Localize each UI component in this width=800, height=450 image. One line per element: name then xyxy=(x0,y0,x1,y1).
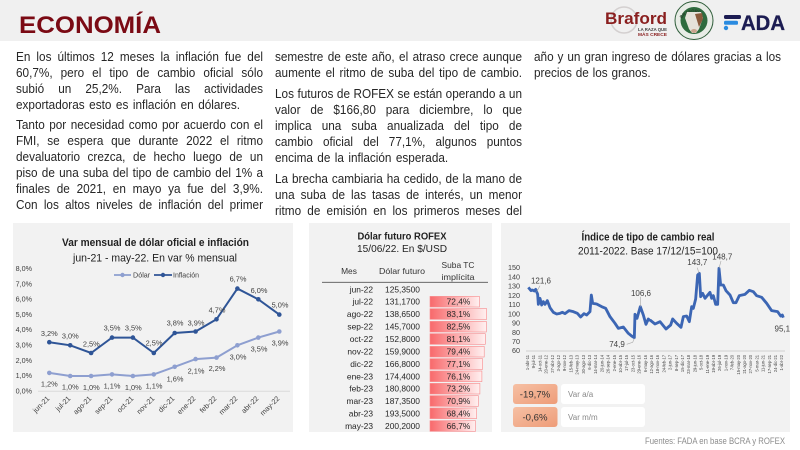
x axis date labels: 1-nov-19 xyxy=(723,354,728,371)
x axis date labels: 14-mar-14 xyxy=(593,354,598,374)
text column 1: FMI, se espera que durante 2022 el ritmo xyxy=(16,134,263,148)
x axis date labels: 2-ene-15 xyxy=(612,354,617,371)
y axis labels: 5,0% xyxy=(16,310,33,319)
data labels with leaders: 106,6 xyxy=(631,289,652,298)
table header: Dólar futuro xyxy=(379,266,425,276)
inflación data labels: 5,0% xyxy=(272,301,289,310)
x axis date labels: 17-sep-21 xyxy=(767,354,772,373)
dólar data labels: 1,1% xyxy=(146,382,163,391)
y axis labels: 130 xyxy=(508,282,520,291)
inflación data labels: 3,5% xyxy=(125,324,142,333)
inflación data labels: 2,5% xyxy=(83,340,100,349)
column: futures price: 125,3500 xyxy=(385,284,420,294)
column: implied rate values: 73,2% xyxy=(447,384,471,394)
x axis date labels: 23-mar-18 xyxy=(686,354,691,374)
inflación data labels: 6,7% xyxy=(230,275,247,284)
inflación data labels: 3,8% xyxy=(167,319,184,328)
inflación data labels: 3,5% xyxy=(104,324,121,333)
y axis labels: 100 xyxy=(508,309,520,318)
inflación data labels: 3,2% xyxy=(41,329,58,338)
logo: Braford: LA RAZA QUE xyxy=(638,27,667,32)
callout: variación anual: Var a/a xyxy=(568,390,594,399)
callout: variación anual xyxy=(513,384,645,404)
x axis date labels: 29-ene-16 xyxy=(637,354,642,374)
column: months: jul-22 xyxy=(352,297,373,307)
x axis date labels: 3-ago-12 xyxy=(556,354,561,371)
column: months: jun-22 xyxy=(349,284,373,294)
x axis labels xyxy=(30,394,281,417)
column: months: abr-23 xyxy=(349,408,373,418)
table header: implícita xyxy=(442,272,475,282)
x axis date labels: 15-may-20 xyxy=(736,354,741,375)
column: futures price: 138,6500 xyxy=(385,309,420,319)
column: futures price: 152,8000 xyxy=(385,334,420,344)
table header: Suba TC xyxy=(442,260,474,270)
text column 1: En los últimos 12 meses la inflación fue del xyxy=(16,50,263,64)
panel: dólar futuro ROFEX table xyxy=(309,223,492,432)
line: inflación xyxy=(47,286,282,355)
text column 1: finales de 2021, en mayo ya fue del 3,9%. xyxy=(16,182,263,196)
callout: variación anual: -19,7% xyxy=(520,390,551,400)
column: months: nov-22 xyxy=(347,347,373,357)
x axis date labels: 5-oct-18 xyxy=(699,354,704,370)
data labels with leaders: 95,1 xyxy=(775,324,791,334)
text column 2: semestre de este año, el atraso crece aunque xyxy=(275,50,522,64)
inflación data labels: 4,7% xyxy=(209,306,226,315)
inflación data labels: 6,0% xyxy=(251,286,268,295)
column: futures price: 187,3500 xyxy=(385,396,420,406)
y axis labels: 2,0% xyxy=(16,356,33,365)
y axis labels: 6,0% xyxy=(16,294,33,304)
logo: Braford seal with cow xyxy=(674,1,714,40)
x axis date labels: 21-ago-20 xyxy=(742,354,747,374)
data labels with leaders: 74,9 xyxy=(609,340,625,349)
column: months: ene-23 xyxy=(347,371,373,381)
callout: variación mensual: -0,6% xyxy=(522,412,548,424)
column: futures price: 180,8000 xyxy=(385,384,420,394)
table header: Mes xyxy=(341,266,357,276)
x axis date labels: 19-abr-19 xyxy=(711,354,716,373)
x axis date labels: 12-ago-16 xyxy=(649,354,654,374)
column: implied rate values: 70,9% xyxy=(447,396,471,406)
y axis labels: 1,0% xyxy=(16,371,33,380)
text column 3 xyxy=(534,50,781,80)
x axis date labels: 14-oct-11 xyxy=(537,354,542,372)
dólar data labels: 1,0% xyxy=(62,383,79,392)
column: implied rate values: 68,4% xyxy=(447,408,471,418)
x axis date labels: 8-sep-17 xyxy=(674,354,679,371)
column: implied rate values: 81,1% xyxy=(447,334,471,344)
x axis date labels: 29-jun-18 xyxy=(692,354,697,372)
column: months: sep-22 xyxy=(347,322,373,332)
text column 2 xyxy=(275,50,522,218)
x axis labels: feb-22 xyxy=(198,394,218,415)
x axis labels: ago-21 xyxy=(71,394,93,416)
header band xyxy=(0,0,800,41)
index line xyxy=(528,268,783,338)
text column 2: La brecha cambiaria ha cedido, de la mano de xyxy=(275,172,522,186)
dólar data labels: 1,1% xyxy=(104,382,121,391)
dólar data labels: 1,0% xyxy=(125,383,142,392)
title: ECONOMÍA xyxy=(19,11,161,39)
x axis date labels: 9-jul-11 xyxy=(531,354,536,368)
text column 1: devaluatorio crezca, de hecho luego de un xyxy=(16,150,263,164)
data labels with leaders xyxy=(531,252,791,349)
x axis labels: nov-21 xyxy=(135,394,156,416)
text column 2: una suba de las tasas de interés, un menor xyxy=(275,188,522,202)
x axis labels: dic-21 xyxy=(156,394,176,414)
text column 2: ritmo de emisión en los primeros meses del xyxy=(275,204,522,218)
x axis labels: sep-21 xyxy=(93,394,114,416)
x axis date labels: 24-may-13 xyxy=(575,354,580,375)
data labels with leaders: 143,7 xyxy=(687,258,708,267)
x axis date labels: 24-feb-17 xyxy=(661,354,666,373)
x axis date labels: 26-jul-19 xyxy=(717,354,722,371)
inflación data labels: 3,0% xyxy=(62,332,79,341)
x axis date labels: 17-jul-15 xyxy=(624,354,629,371)
text column 2: encima de la inflación esperada. xyxy=(275,151,448,165)
text column 2: valor de $166,80 para diciembre, lo que xyxy=(275,103,522,117)
y axis labels: 4,0% xyxy=(16,325,33,334)
y axis labels: 80 xyxy=(512,328,520,337)
column: implied rate values: 83,1% xyxy=(447,309,471,319)
column: implied rate values: 77,1% xyxy=(447,359,471,369)
chart subtitle: 2011-2022. Base 17/12/15=100 xyxy=(578,246,718,258)
dólar data labels: 3,5% xyxy=(251,344,268,353)
chart title: Var mensual de dólar oficial e inflación xyxy=(62,237,249,249)
x axis date labels: 15-dic-17 xyxy=(680,354,685,372)
y axis labels: 150 xyxy=(508,263,520,272)
dólar data labels: 1,0% xyxy=(83,383,100,392)
column: months: may-23 xyxy=(345,421,373,431)
text column 3: año y un gran ingreso de dólares gracias a los xyxy=(534,50,781,64)
x axis labels: may-22 xyxy=(258,394,281,417)
y axis labels: 110 xyxy=(509,300,520,309)
column: implied rate values: 79,4% xyxy=(447,347,471,357)
y axis labels: 0,0% xyxy=(16,386,33,396)
table title: Dólar futuro ROFEX xyxy=(358,232,447,242)
table subtitle: 15/06/22. En $/USD xyxy=(357,244,447,255)
x axis date labels: 11-ene-19 xyxy=(705,354,710,373)
column: months: feb-23 xyxy=(349,384,373,394)
line: dólar xyxy=(47,329,282,378)
x axis date labels: 18-nov-16 xyxy=(655,354,660,373)
callout: variación mensual: Var m/m xyxy=(568,413,598,422)
text column 2: Los futuros de ROFEX se están operando a un xyxy=(275,87,522,101)
y axis labels: 120 xyxy=(508,291,520,300)
x axis date labels: 30-ago-13 xyxy=(581,354,586,374)
column: futures price: 193,5000 xyxy=(385,408,420,418)
legend: Inflación xyxy=(173,270,199,280)
x axis date labels: 20-ene-12 xyxy=(544,354,549,374)
dólar data labels: 2,1% xyxy=(188,367,205,376)
column: futures price: 145,7000 xyxy=(385,322,420,332)
x axis date labels: 23-oct-15 xyxy=(630,354,635,372)
column: futures price: 174,4000 xyxy=(385,371,420,381)
logo: FADA: ADA xyxy=(741,12,785,35)
x axis date labels: 20-jun-14 xyxy=(599,354,604,372)
text column 1: Tanto por necesidad como por acuerdo con el xyxy=(16,118,263,132)
column: months: ago-22 xyxy=(347,309,373,319)
x axis date labels: 15-feb-13 xyxy=(568,354,573,373)
x axis date labels: 5-mar-21 xyxy=(754,354,759,372)
y axis labels: 60 xyxy=(512,346,520,355)
column: months xyxy=(345,284,373,431)
x axis date labels: 7-feb-20 xyxy=(730,354,735,370)
x axis date labels: 9-nov-12 xyxy=(562,354,567,371)
logo: Braford xyxy=(605,7,668,38)
text column 1 xyxy=(16,50,264,212)
column: futures price: 131,1700 xyxy=(385,297,420,307)
column: futures price: 200,2000 xyxy=(385,421,420,431)
x axis labels: oct-21 xyxy=(115,394,135,415)
x axis labels: jul-21 xyxy=(53,394,72,414)
x axis date labels: 1-abr-22 xyxy=(779,354,784,370)
x axis date labels: 10-abr-15 xyxy=(618,354,623,373)
bars: implied rate xyxy=(430,296,487,431)
x axis date labels: 2-jun-17 xyxy=(668,354,673,370)
text column 1: exportadoras esto es inflación en dólares. xyxy=(16,98,240,112)
x axis date labels: 11-jun-21 xyxy=(761,354,766,372)
column: futures price: 166,8000 xyxy=(385,359,420,369)
logo: Braford seal with cow: BRAFORD xyxy=(680,10,701,18)
column: implied rate values: 82,5% xyxy=(447,322,471,332)
column: months: dic-22 xyxy=(350,359,373,369)
legend: Dólar xyxy=(133,270,151,280)
column: months: mar-23 xyxy=(346,396,373,406)
text column 2: cambio oficial del 77,1%, algunos puntos xyxy=(275,135,522,149)
text column 1: Con los altos niveles de inflación del primer xyxy=(16,198,263,212)
text column 2: implica una suba anualizada del tipo de xyxy=(275,119,522,133)
callout: variación mensual xyxy=(513,407,645,427)
column: implied rate values: 76,1% xyxy=(447,371,471,381)
x axis labels: mar-22 xyxy=(217,394,239,417)
panel: monthly dollar and inflation chart xyxy=(13,223,293,432)
x axis labels: abr-22 xyxy=(239,394,260,415)
chart title: Índice de tipo de cambio real xyxy=(582,230,714,244)
dólar data labels: 1,6% xyxy=(167,374,184,383)
logo: Braford: MÁS CRECE xyxy=(638,31,668,38)
inflación data labels: 3,9% xyxy=(188,319,205,328)
logo: Braford: Braford xyxy=(605,10,667,28)
dólar data labels: 3,0% xyxy=(230,353,247,362)
panel: real exchange rate index xyxy=(501,223,791,432)
y axis labels xyxy=(508,263,520,355)
column: futures price: 159,9000 xyxy=(385,347,420,357)
text column 2: aumente el ritmo de suba del tipo de cambio. xyxy=(275,66,522,80)
inflación data labels xyxy=(41,275,289,349)
x axis date labels: 6-may-16 xyxy=(643,354,648,372)
y axis labels: 70 xyxy=(512,337,520,346)
data labels with leaders: 148,7 xyxy=(712,252,733,262)
legend xyxy=(114,270,199,280)
data labels with leaders: 121,6 xyxy=(531,276,552,285)
table header xyxy=(322,260,488,282)
dólar data labels: 2,2% xyxy=(209,364,226,373)
column: implied rate values: 66,7% xyxy=(447,421,471,431)
text column 1: subió un 25,2%. Para las actividades xyxy=(16,82,263,96)
x axis date labels: 26-sep-14 xyxy=(606,354,611,373)
y axis labels: 3,0% xyxy=(16,340,33,350)
x axis date labels: 24-dic-21 xyxy=(773,354,778,372)
inflación data labels: 2,5% xyxy=(146,339,163,348)
x axis date labels xyxy=(525,354,784,375)
y axis labels: 140 xyxy=(508,272,520,281)
x axis date labels: 6-dic-13 xyxy=(587,354,592,370)
dólar data labels: 3,9% xyxy=(272,339,289,348)
dólar data labels: 1,2% xyxy=(41,380,58,389)
text column 1: 60,7%, pero el tipo de cambio oficial sólo xyxy=(16,66,263,80)
column: futures price xyxy=(385,284,420,431)
y axis labels: 7,0% xyxy=(16,280,33,288)
column: months: oct-22 xyxy=(350,334,373,344)
y axis labels: 90 xyxy=(512,318,520,328)
y axis labels xyxy=(16,264,33,396)
chart subtitle: jun-21 - may-22. En var % mensual xyxy=(72,252,237,264)
dólar data labels xyxy=(41,339,289,392)
x axis labels: ene-22 xyxy=(175,394,197,416)
y axis labels: 8,0% xyxy=(16,264,33,273)
x axis date labels: 27-abr-12 xyxy=(550,354,555,373)
column: implied rate values xyxy=(447,297,471,431)
text column 3: precios de los granos. xyxy=(534,66,651,80)
text column 1: piso de una suba del tipo de cambio del 1% a xyxy=(16,166,263,180)
x axis labels: jun-21 xyxy=(30,394,51,415)
column: implied rate values: 72,4% xyxy=(447,297,471,307)
x axis date labels: 27-nov-20 xyxy=(748,354,753,373)
x axis date labels: 1-abr-11 xyxy=(525,354,530,370)
